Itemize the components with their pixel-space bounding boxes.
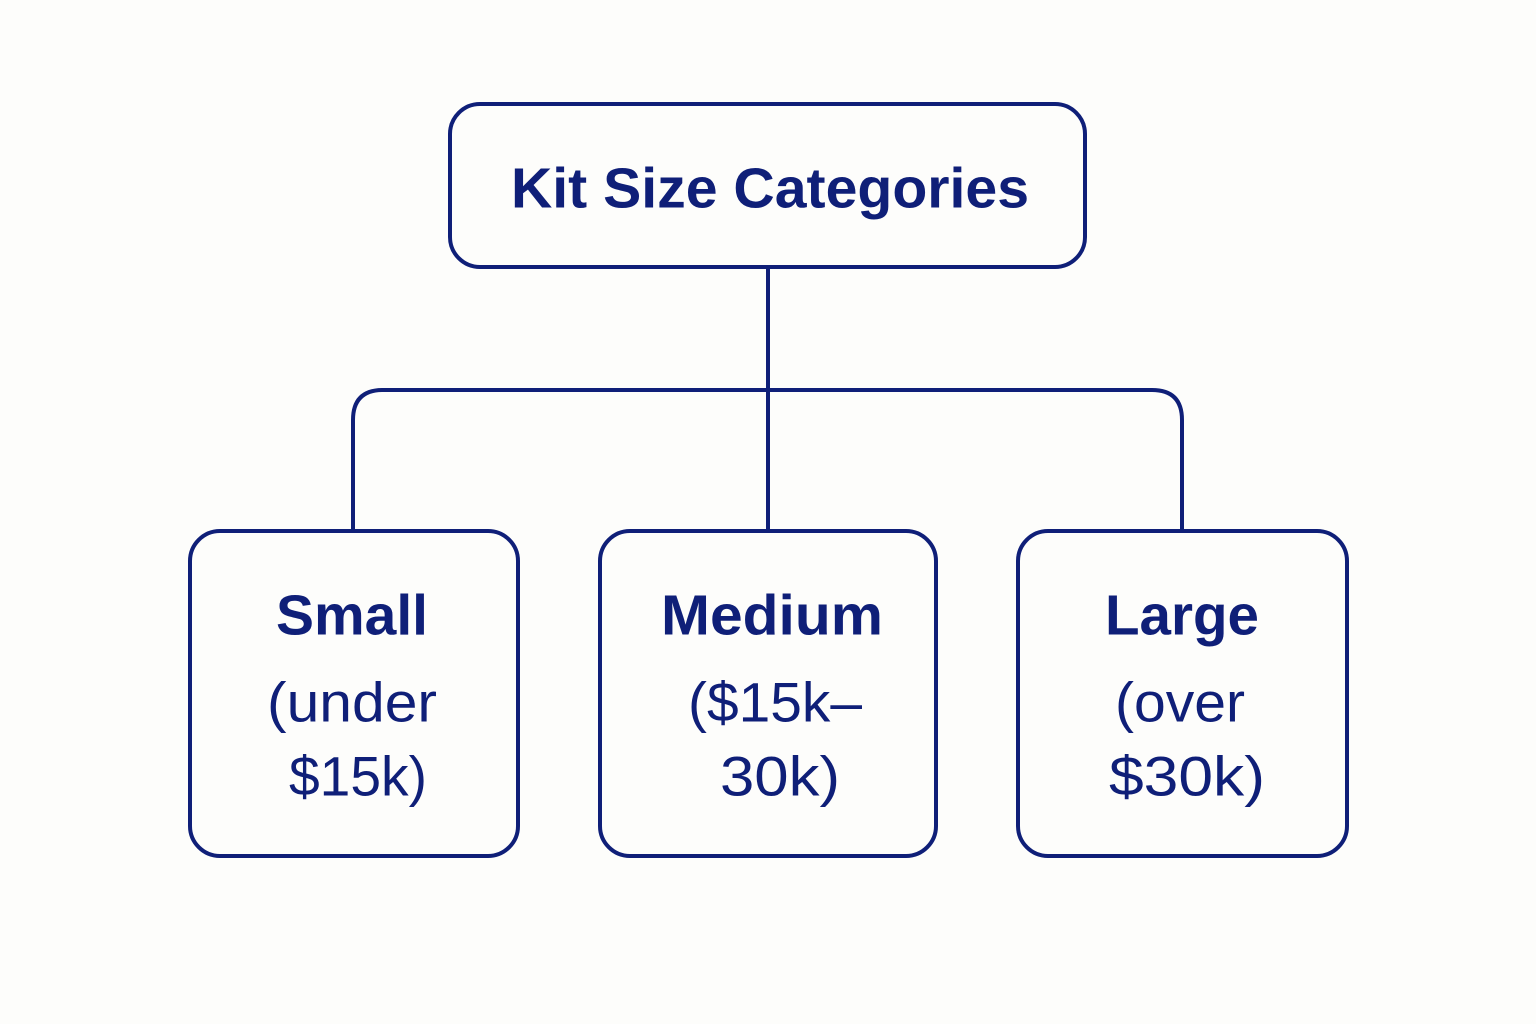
box: Large: (over — [1115, 670, 1245, 734]
box: Small: $15k) — [289, 744, 427, 808]
box: Medium — [600, 531, 936, 856]
box: Large: Large — [1105, 584, 1259, 648]
connector lines — [353, 267, 1182, 530]
box: Kit Size Categories: Kit Size Categories — [511, 156, 1029, 220]
box: Large — [1018, 531, 1347, 856]
box: Small — [190, 531, 518, 856]
box: Medium: 30k) — [720, 744, 840, 808]
box: Small: (under — [267, 670, 437, 734]
box: Kit Size Categories — [450, 104, 1085, 267]
box: Small: Small — [276, 584, 428, 648]
box: Medium: ($15k– — [688, 670, 863, 734]
box: Large: $30k) — [1109, 744, 1265, 808]
box: Medium: Medium — [661, 584, 883, 648]
